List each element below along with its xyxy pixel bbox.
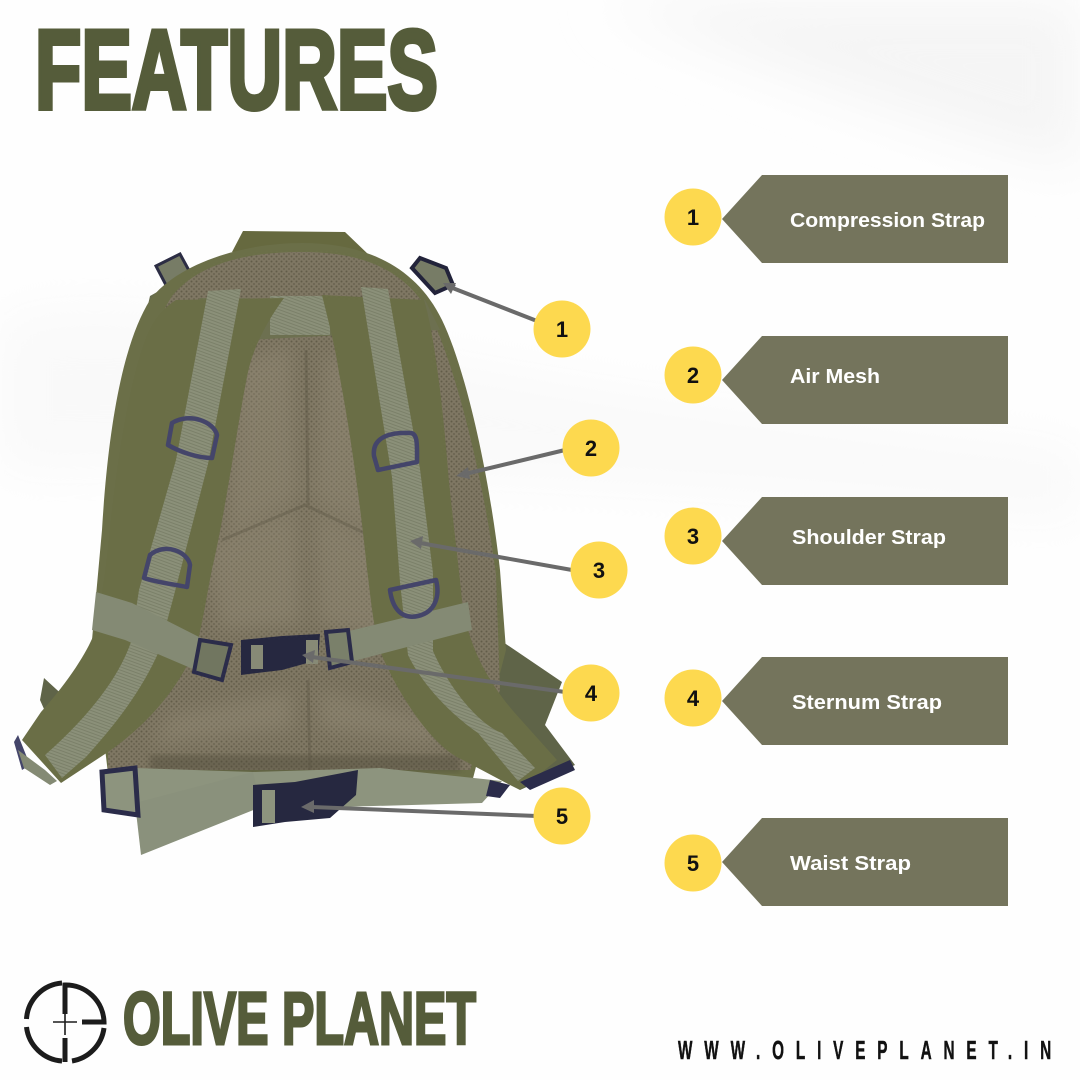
- legend item 3: shoulder strap: Shoulder Strap: [792, 527, 946, 549]
- legend item 4: sternum strap: 4: [687, 686, 700, 711]
- legend item 2: air mesh: [664, 336, 1008, 424]
- top handle: [232, 231, 370, 262]
- legend item 1: compression strap: [664, 175, 1008, 263]
- pointer arrow 1: [443, 283, 537, 321]
- backpack illustration: [14, 231, 575, 855]
- website url: WWW.OLIVEPLANET.IN: [678, 1037, 1051, 1065]
- sternum strap: [92, 592, 472, 680]
- legend item 3: shoulder strap: 3: [687, 524, 699, 549]
- left compression clip: [145, 254, 200, 318]
- pack body shell: [92, 243, 506, 790]
- air mesh back panel: [108, 252, 500, 772]
- legend item 4: sternum strap: [664, 657, 1008, 745]
- right compression clip: [412, 258, 453, 293]
- pointer arrow 3: [410, 536, 572, 570]
- waist strap wings behind body: [40, 640, 575, 790]
- marker 3 on backpack: [570, 542, 628, 598]
- sternum buckle: [241, 634, 320, 675]
- title: FEATURES: [35, 8, 438, 132]
- marker 3 on backpack: 3: [593, 558, 605, 583]
- legend item 5: waist strap: Waist Strap: [790, 853, 911, 875]
- marker 5 on backpack: [534, 788, 590, 844]
- left shoulder webbing: [45, 289, 241, 778]
- legend item 5: waist strap: 5: [687, 851, 699, 876]
- marker 4 on backpack: [562, 664, 620, 722]
- pointer arrow 5: [301, 800, 537, 816]
- pointer arrow 2: [456, 450, 565, 479]
- D-rings: [144, 418, 437, 617]
- waist buckle: [253, 770, 358, 827]
- legend item 4: sternum strap: Sternum Strap: [792, 692, 942, 714]
- top yoke webbing: [150, 298, 440, 345]
- logo wordmark: OLIVE PLANET: [123, 977, 476, 1060]
- legend item 2: air mesh: 2: [687, 363, 699, 388]
- pointer arrow 4: [302, 650, 565, 692]
- logo: crosshair mark: [26, 983, 104, 1062]
- legend item 1: compression strap: Compression Strap: [790, 210, 985, 232]
- left shoulder pad: [22, 298, 284, 783]
- right shoulder webbing: [361, 287, 535, 781]
- marker 1 on backpack: [534, 300, 590, 358]
- legend item 2: air mesh: Air Mesh: [790, 366, 880, 388]
- right shoulder pad: [322, 295, 557, 790]
- legend item 3: shoulder strap: [664, 497, 1008, 585]
- marker 2 on backpack: 2: [585, 436, 597, 461]
- legend item 5: waist strap: [664, 818, 1008, 906]
- marker 2 on backpack: [562, 420, 620, 476]
- legend item 1: compression strap: 1: [687, 205, 699, 230]
- marker 1 on backpack: 1: [556, 317, 568, 342]
- marker 4 on backpack: 4: [585, 681, 598, 706]
- marker 5 on backpack: 5: [556, 804, 568, 829]
- waist strap: [14, 735, 575, 855]
